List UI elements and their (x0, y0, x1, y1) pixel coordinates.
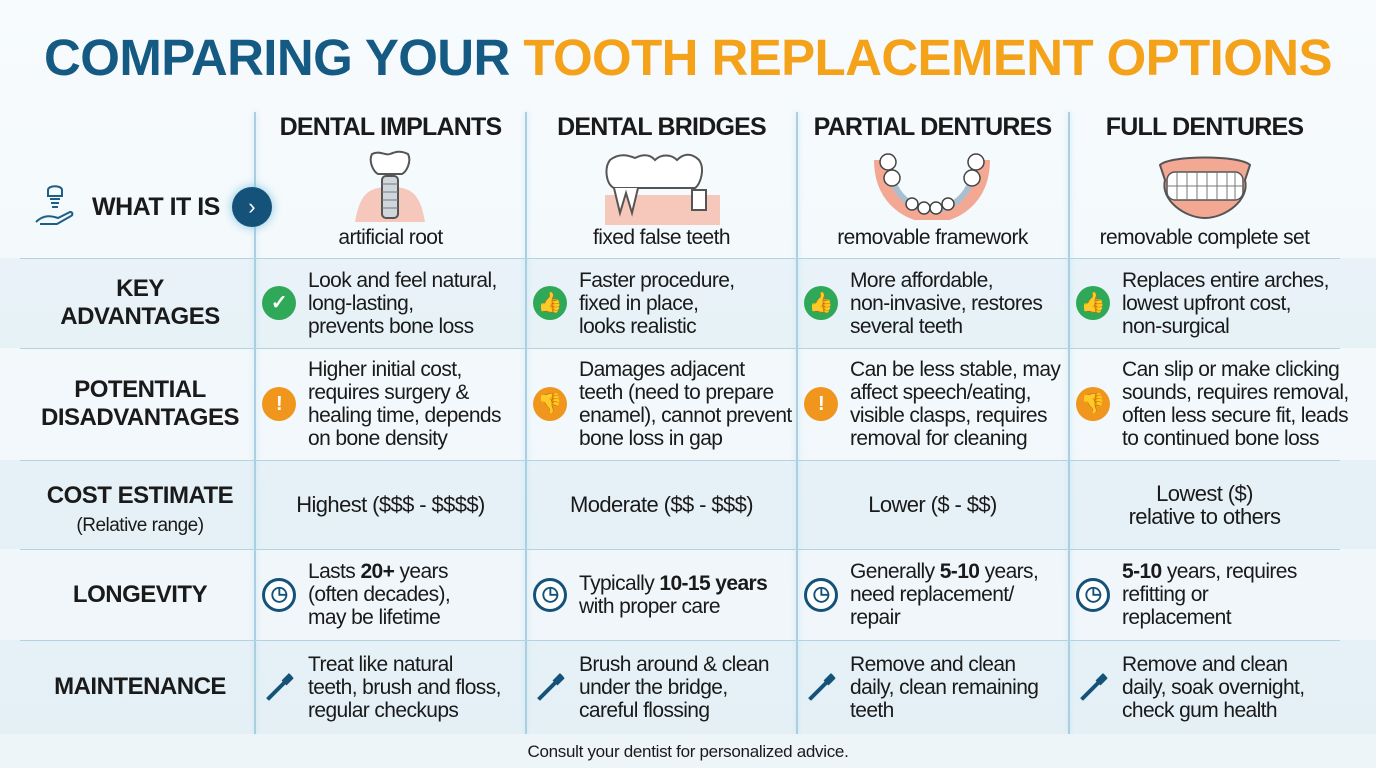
text: on bone density (308, 427, 447, 450)
text: Moderate ($$ - $$$) (570, 492, 753, 517)
label: potential disadvantages: DISADVANTAGES (41, 404, 239, 431)
text: affect speech/eating, (850, 381, 1031, 404)
text: repair (850, 606, 900, 629)
header: dental implants: DENTAL IMPLANTS (280, 113, 501, 141)
text: Lasts 20+ years (308, 560, 448, 583)
text: 👎 (538, 392, 562, 414)
label: cost estimate (47, 482, 233, 536)
text: long-lasting, (308, 292, 413, 314)
text: ◷ (1085, 583, 1101, 605)
text: removal for cleaning (850, 427, 1027, 450)
text: 👍 (809, 292, 833, 314)
text: often less secure fit, leads (1122, 404, 1348, 427)
icon: bridge (605, 154, 720, 225)
text: non-surgical (1122, 314, 1229, 338)
text: need replacement/ (850, 583, 1014, 606)
text: Faster procedure, (579, 268, 735, 292)
text: replacement (1122, 606, 1231, 629)
text: ◷ (542, 583, 558, 605)
text: teeth (need to prepare (579, 381, 774, 404)
text: careful flossing (579, 698, 709, 722)
label: potential disadvantages (41, 376, 239, 431)
text: ◷ (271, 583, 287, 605)
label: key advantages (60, 275, 220, 330)
row: disadvantages (262, 358, 1349, 450)
text: non-invasive, restores (850, 292, 1042, 314)
label: what it is (35, 180, 278, 234)
text: bone loss in gap (579, 427, 722, 450)
text: Generally 5-10 years, (850, 560, 1038, 583)
text: Replaces entire arches, (1122, 268, 1329, 292)
text: More affordable, (850, 268, 993, 292)
text: visible clasps, requires (850, 404, 1047, 427)
text: ! (818, 392, 824, 414)
text: removable framework (837, 226, 1028, 249)
text: fixed false teeth (593, 226, 730, 249)
text: (often decades), (308, 583, 450, 606)
text: requires surgery & (308, 381, 469, 404)
label: what it is: › (248, 194, 256, 219)
text: prevents bone loss (308, 314, 473, 338)
header: full dentures: FULL DENTURES (1106, 113, 1303, 141)
text: teeth, brush and floss, (308, 676, 501, 698)
text: Can be less stable, may (850, 358, 1060, 381)
text: teeth (850, 698, 894, 722)
footer note: Consult your dentist for personalized advice. (527, 742, 848, 761)
label: what it is: WHAT IT IS (92, 192, 220, 220)
text: under the bridge, (579, 676, 728, 698)
text: 5-10 years, requires (1122, 560, 1297, 583)
text: Remove and clean (1122, 652, 1288, 676)
text: looks realistic (579, 314, 696, 338)
text: ◷ (813, 583, 829, 605)
label: longevity: LONGEVITY (73, 580, 207, 608)
row: advantages (262, 268, 1329, 338)
text: to continued bone loss (1122, 427, 1319, 450)
text: refitting or (1122, 583, 1208, 606)
row: longevity (262, 560, 1297, 629)
label: potential disadvantages: POTENTIAL (74, 376, 206, 403)
header: partial dentures: PARTIAL DENTURES (814, 113, 1051, 141)
text: check gum health (1122, 698, 1277, 722)
text: Can slip or make clicking (1122, 358, 1339, 381)
text: fixed in place, (579, 292, 698, 314)
text: with proper care (579, 594, 720, 618)
text: Treat like natural (308, 652, 453, 676)
text: Highest ($$$ - $$$$) (296, 492, 485, 517)
text: regular checkups (308, 698, 458, 722)
row: maintenance (266, 652, 1305, 722)
text: daily, soak overnight, (1122, 676, 1305, 698)
text: Look and feel natural, (308, 268, 497, 292)
text: sounds, requires removal, (1122, 381, 1349, 404)
icon: full denture (1158, 156, 1252, 219)
text: 👍 (538, 292, 562, 314)
text: Typically 10-15 years (579, 572, 767, 594)
label: cost estimate: COST ESTIMATE (47, 482, 233, 509)
label: key advantages: ADVANTAGES (60, 303, 220, 330)
text: 👎 (1081, 392, 1105, 414)
captions (338, 226, 1310, 249)
title: COMPARING YOUR TOOTH REPLACEMENT OPTIONS (44, 29, 1332, 86)
text: Damages adjacent (579, 358, 745, 381)
header: dental bridges: DENTAL BRIDGES (557, 113, 766, 141)
text: Brush around & clean (579, 652, 769, 676)
text: relative to others (1129, 504, 1280, 528)
row: cost (296, 480, 1280, 528)
text: Lower ($ - $$) (868, 492, 997, 517)
icon: implant (355, 150, 425, 222)
label: maintenance: MAINTENANCE (54, 673, 226, 700)
text: healing time, depends (308, 404, 501, 427)
text: lowest upfront cost, (1122, 292, 1291, 314)
text: enamel), cannot prevent (579, 404, 792, 427)
icon: partial denture (874, 153, 990, 220)
label: cost estimate: (Relative range) (76, 515, 204, 536)
text: Lowest ($) (1156, 480, 1253, 506)
text: may be lifetime (308, 606, 440, 629)
text: ! (276, 392, 282, 414)
label: key advantages: KEY (116, 275, 164, 302)
text: artificial root (338, 226, 443, 249)
text: ✓ (271, 292, 287, 314)
text: several teeth (850, 314, 962, 338)
text: daily, clean remaining (850, 676, 1038, 698)
text: Higher initial cost, (308, 358, 462, 381)
text: Remove and clean (850, 652, 1016, 676)
text: removable complete set (1100, 226, 1309, 249)
text: 👍 (1081, 292, 1105, 314)
